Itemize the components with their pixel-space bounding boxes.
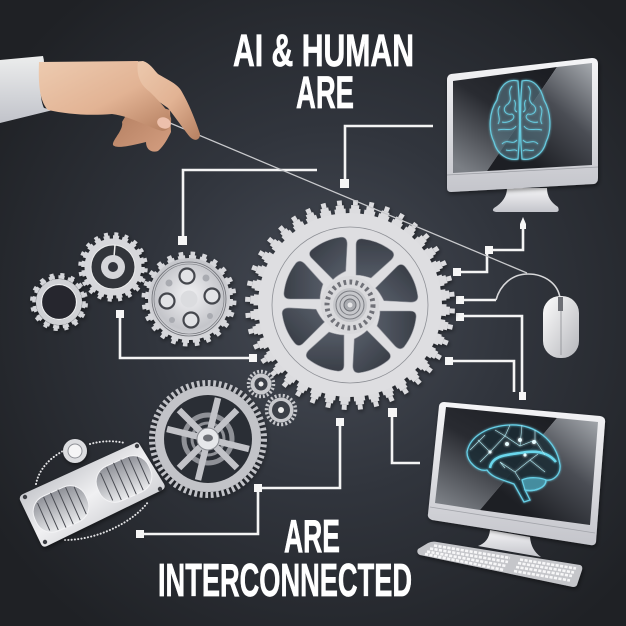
bezel [428, 402, 605, 545]
hand and sleeve [0, 56, 200, 152]
vent plate [20, 439, 165, 547]
gear: studded plate [144, 254, 234, 344]
bottom heading: INTERCONNECTED [158, 554, 412, 606]
brain: side view [467, 425, 560, 502]
dotted orbit [36, 441, 148, 540]
screen: right side [480, 418, 598, 525]
gear: tiny upper [248, 372, 274, 396]
title: AI & HUMAN [233, 25, 414, 76]
screen: right side [487, 63, 592, 171]
back of hand and thumb [39, 61, 171, 131]
title: ARE [296, 67, 354, 118]
monitor: top [447, 58, 598, 212]
index finger [130, 61, 200, 140]
mouse [543, 296, 579, 358]
big gear hub [321, 276, 379, 334]
lower fingers [113, 100, 171, 152]
plate body [20, 442, 165, 547]
monitor: bottom [428, 402, 605, 557]
keyboard [417, 542, 582, 587]
connector nodes [116, 179, 526, 538]
bezel [447, 58, 598, 192]
gear: left ring [32, 274, 86, 330]
keys [425, 546, 576, 580]
screen: left side [435, 407, 557, 510]
big gear [248, 202, 452, 408]
pointer wire [170, 123, 527, 273]
gear: tiny lower [266, 396, 296, 424]
title [233, 25, 414, 118]
thumb nail [156, 115, 172, 131]
connector lines [120, 126, 560, 534]
bottom heading: ARE [284, 510, 340, 562]
sleeve [0, 56, 53, 123]
stand [493, 188, 559, 212]
knob [63, 439, 87, 463]
stand [478, 530, 541, 557]
screen: left side [453, 67, 557, 173]
brain: top view [490, 80, 550, 159]
bottom heading [158, 510, 412, 606]
gear: bottom spoked [152, 383, 264, 495]
gear: small dial [80, 234, 146, 300]
